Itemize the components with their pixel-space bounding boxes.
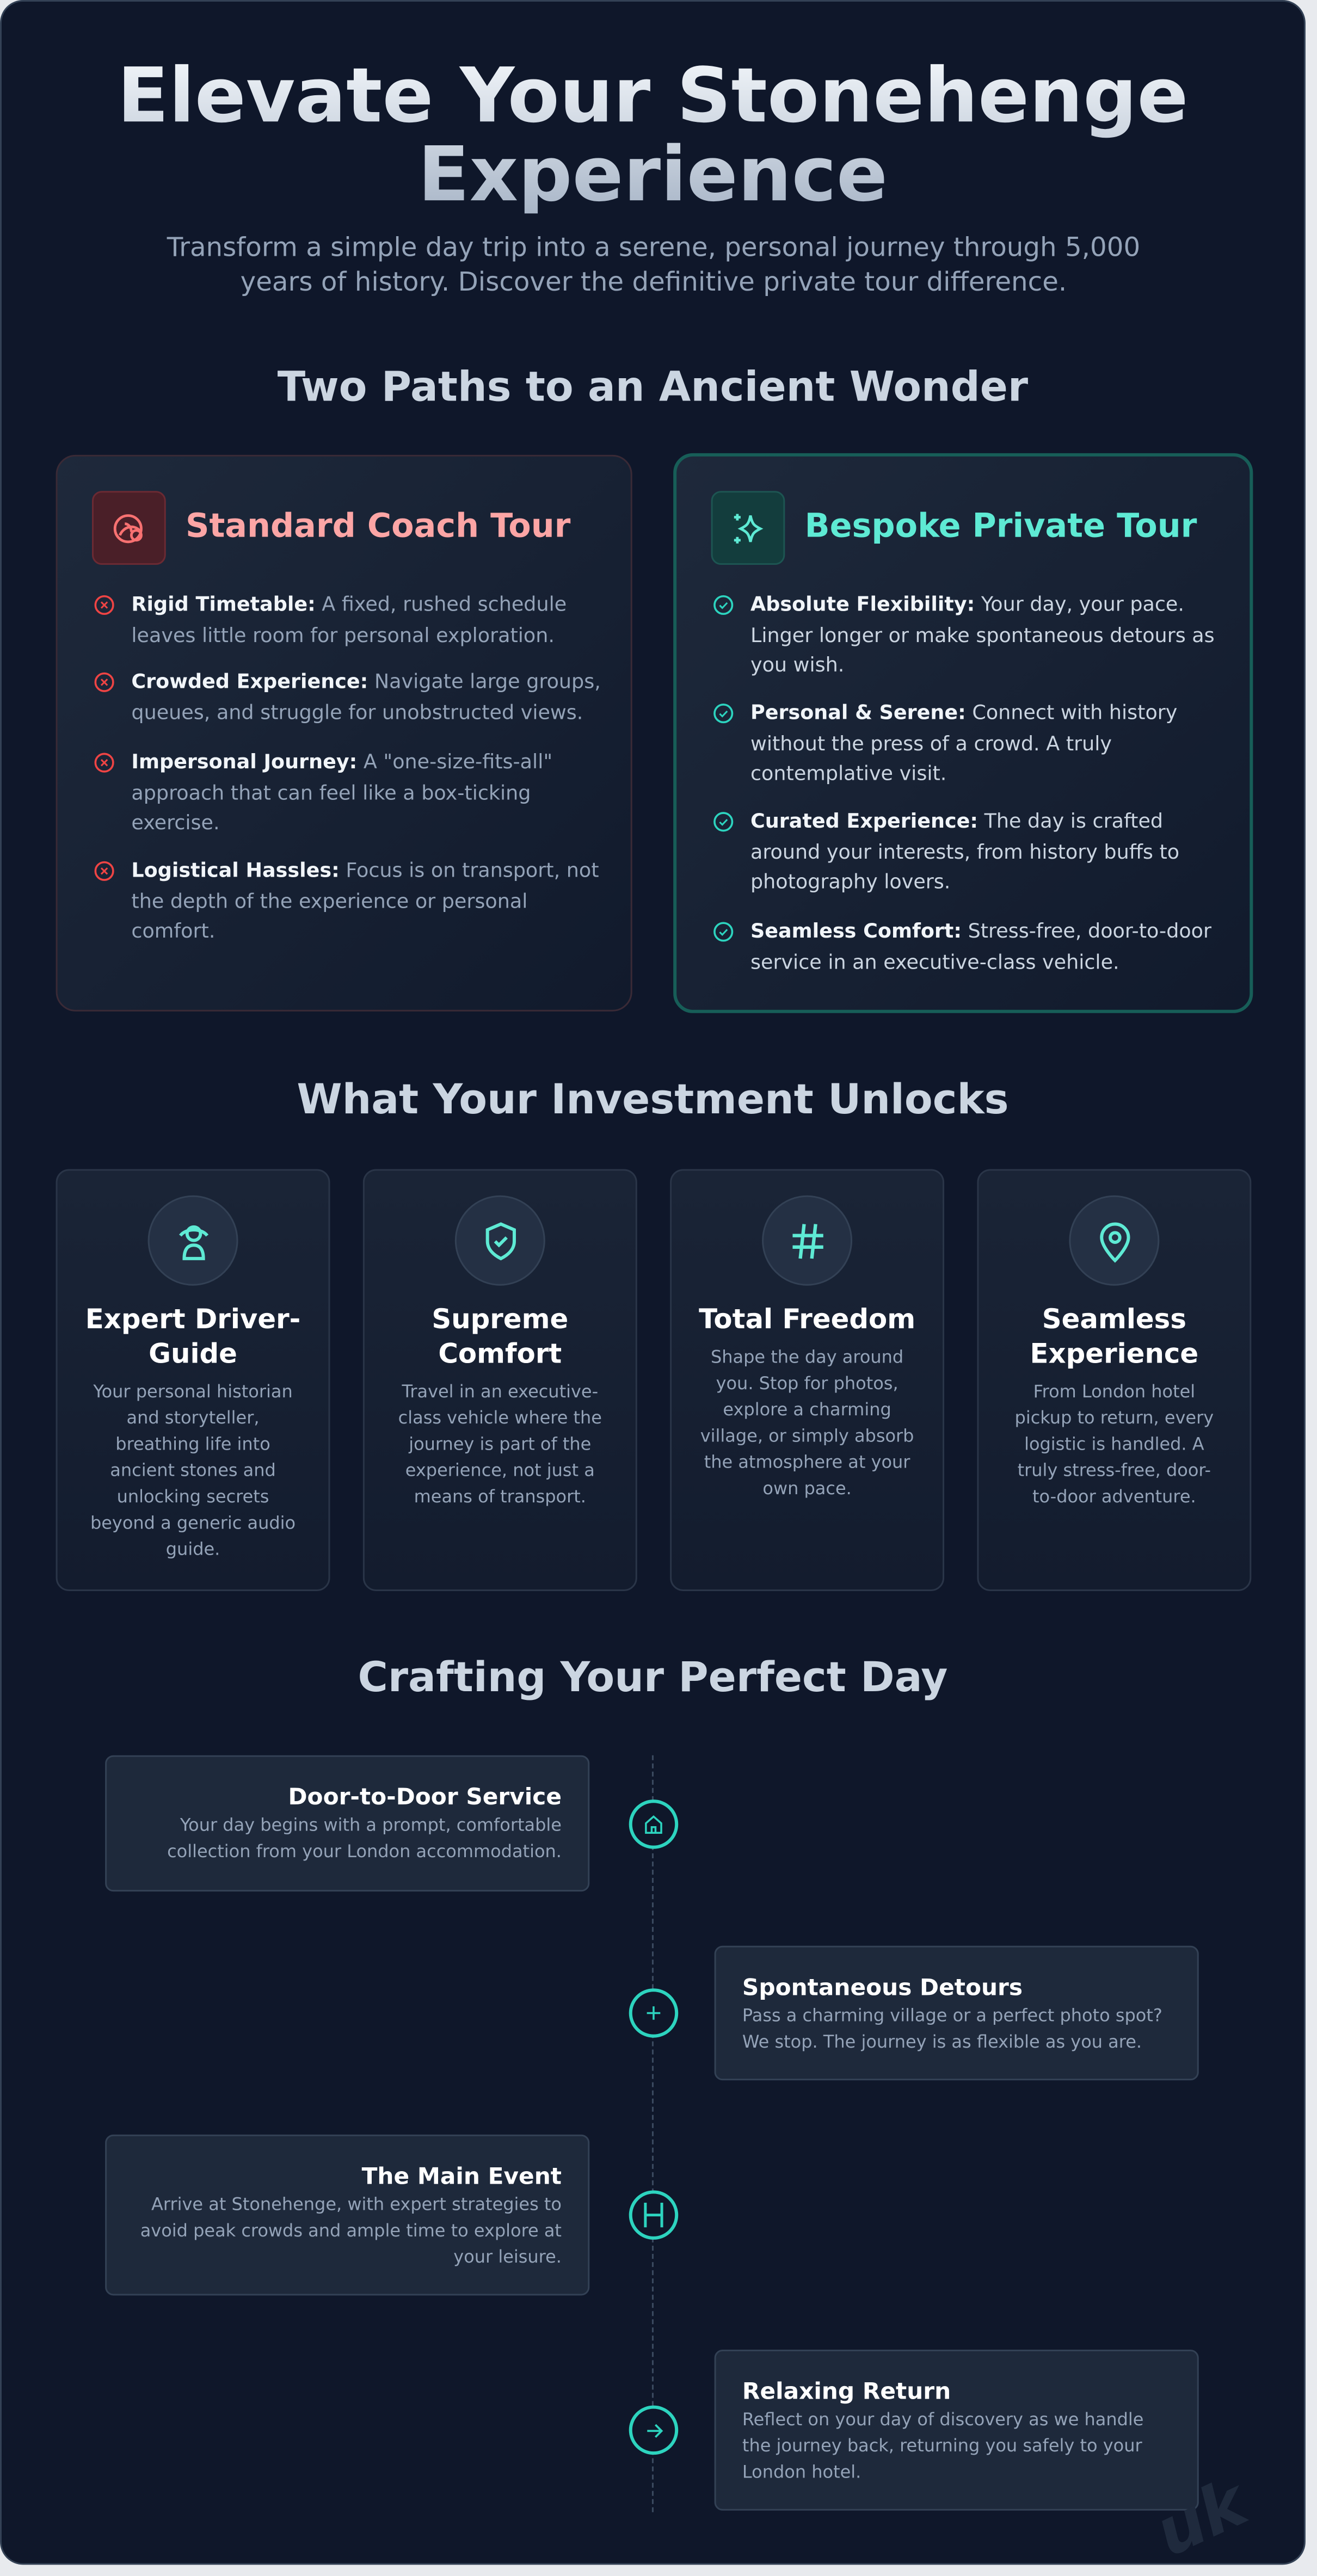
subtitle: Transform a simple day trip into a serene, personal journey through 5,000 years of history. Discover the definitive private tour difference. xyxy=(167,231,1140,297)
icon: stones xyxy=(629,2190,678,2240)
feature card: supreme comfort xyxy=(363,1169,637,1591)
title: Elevate Your Stonehenge xyxy=(117,51,1189,139)
icon: plus xyxy=(629,1988,678,2038)
list item: seamless comfort: Seamless Comfort: Stress-free, door-to-door service in an executive-class vehicle. xyxy=(750,920,1211,973)
icon: shield xyxy=(455,1195,545,1286)
heading: investment unlocks: What Your Investment Unlocks xyxy=(297,1075,1009,1123)
feature card: expert driver-guide: Your personal historian and storyteller, breathing life into ancient stones and unlocking secrets beyond a generic audio guide. xyxy=(90,1383,296,1560)
feature card: supreme comfort: Travel in an executive-class vehicle where the journey is part of the experience, not just a means of transport. xyxy=(398,1383,602,1507)
icon: hash xyxy=(762,1195,852,1286)
feature card: total freedom: Shape the day around you. Stop for photos, explore a charming village, or simply absorb the atmosphere at your own pace. xyxy=(700,1348,914,1499)
icon: sparkle xyxy=(711,491,785,565)
icon: coach xyxy=(92,491,166,565)
timeline line xyxy=(652,1755,654,2512)
icon: guide xyxy=(148,1195,238,1286)
timeline step: door-to-door: Your day begins with a prompt, comfortable collection from your London accommodation. xyxy=(167,1816,562,1862)
icon: arrow xyxy=(629,2406,678,2455)
timeline step: return: Reflect on your day of discovery as we handle the journey back, returning you safely to your London hotel. xyxy=(742,2411,1144,2482)
list item: curated experience: Curated Experience: The day is crafted around your interests, from history buffs to photography lovers. xyxy=(750,810,1179,893)
heading: crafting your perfect day: Crafting Your Perfect Day xyxy=(358,1654,947,1701)
timeline step: door-to-door xyxy=(105,1755,589,1891)
heading: standard coach tour: Standard Coach Tour xyxy=(186,506,570,545)
list item: logistical hassles: Logistical Hassles: Focus is on transport, not the depth of the experience or personal comfort. xyxy=(131,859,599,942)
timeline step: door-to-door: Door-to-Door Service xyxy=(288,1785,562,1811)
timeline step: return xyxy=(715,2350,1199,2511)
list item: crowded experience: Crowded Experience: Navigate large groups, queues, and struggle for unobstructed views. xyxy=(131,670,601,723)
feature card: seamless experience: Seamless Experience xyxy=(1030,1304,1198,1370)
feature card: expert driver-guide xyxy=(56,1169,330,1591)
timeline step: main event xyxy=(105,2135,589,2295)
timeline step: detours: Pass a charming village or a perfect photo spot? We stop. The journey is as flexible as you are. xyxy=(742,2006,1162,2053)
panel: bespoke private tour xyxy=(673,453,1253,1013)
timeline step: detours: Spontaneous Detours xyxy=(742,1975,1023,2001)
timeline step: return: Relaxing Return xyxy=(742,2379,951,2406)
list item: rigid timetable: Rigid Timetable: A fixed, rushed schedule leaves little room for personal exploration. xyxy=(131,593,567,646)
feature card: total freedom xyxy=(670,1169,944,1591)
feature card: expert driver-guide: Expert Driver-Guide xyxy=(85,1304,300,1370)
list item: absolute flexibility: Absolute Flexibility: Your day, your pace. Linger longer or make spontaneous detours as you wish. xyxy=(750,593,1215,676)
panel: standard coach tour xyxy=(56,455,632,1012)
list item: impersonal journey: Impersonal Journey: A "one-size-fits-all" approach that can feel like a box-ticking exercise. xyxy=(131,750,552,834)
timeline step: main event: The Main Event xyxy=(362,2164,562,2190)
feature card: seamless experience xyxy=(977,1169,1251,1591)
feature card: seamless experience: From London hotel pickup to return, every logistic is handled. A truly stress-free, door-to-door adventure. xyxy=(1015,1383,1214,1507)
heading: bespoke private tour: Bespoke Private Tour xyxy=(805,506,1197,545)
timeline step: main event: Arrive at Stonehenge, with expert strategies to avoid peak crowds and ample time to explore at your leisure. xyxy=(140,2195,562,2267)
list item: personal & serene: Personal & Serene: Connect with history without the press of a crowd. A truly contemplative visit. xyxy=(750,701,1177,785)
feature card: supreme comfort: Supreme Comfort xyxy=(432,1304,568,1370)
heading: two paths: Two Paths to an Ancient Wonder xyxy=(278,363,1028,410)
icon: map pin xyxy=(1069,1195,1159,1286)
feature card: total freedom: Total Freedom xyxy=(699,1304,915,1335)
icon: home xyxy=(629,1799,678,1849)
title: Experience xyxy=(418,130,888,218)
timeline step: detours xyxy=(715,1946,1199,2080)
title xyxy=(2,56,1304,213)
